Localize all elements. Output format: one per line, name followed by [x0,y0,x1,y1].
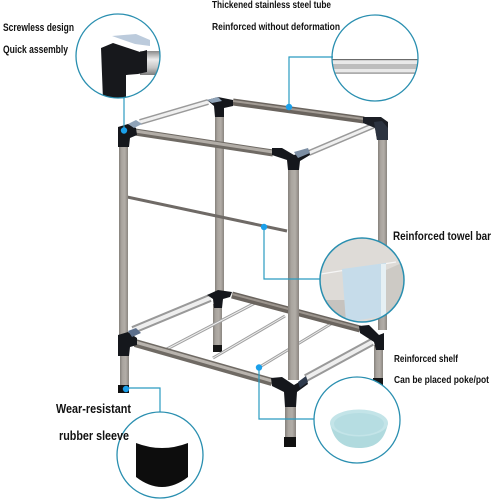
sleeve stem [127,388,160,412]
icon: basin [330,410,388,448]
towel circle outline [320,238,404,322]
label: reinforced shelf: Reinforced shelf [394,353,458,365]
connector circle image [101,34,160,98]
callout: towel bar detail [261,224,408,326]
towel dot [261,224,267,230]
label: quick assembly: Quick assembly [3,44,69,56]
shelf dot [256,364,262,371]
top connectors [118,97,388,170]
bottom tubes [133,294,372,382]
tube dot [286,104,292,110]
callout: connector detail [75,13,161,134]
towel circle image [320,238,404,322]
towel bar [127,197,287,231]
sleeve circle outline [117,412,203,498]
tube stem [289,57,333,107]
connector dot [121,127,127,134]
towel stem [264,227,320,279]
callout: rubber sleeve detail [117,386,203,498]
label: wear-resistant: Wear-resistant [56,402,132,416]
back legs [213,112,387,385]
top tubes [135,101,375,153]
shelf circle background [314,377,400,463]
rack frame [118,97,388,447]
callout: tube detail [286,15,420,110]
label: reinforced without deformation: Reinforced without deformation [212,22,340,33]
sleeve dot [123,386,129,392]
connector stem [123,97,125,130]
label: screwless design: Screwless design [3,22,74,34]
front legs [118,140,299,447]
tube circle image [330,59,420,74]
label: rubber sleeve: rubber sleeve [59,429,129,443]
icon: black rubber sleeve [136,443,188,487]
bottom connectors [118,290,384,407]
label: thickened stainless steel tube: Thickened stainless steel tube [212,0,331,11]
connector circle outline [76,14,160,98]
callout: shelf detail [256,364,400,463]
shelf bars [165,303,334,368]
shelf stem [259,367,314,419]
tube circle outline [332,15,418,101]
